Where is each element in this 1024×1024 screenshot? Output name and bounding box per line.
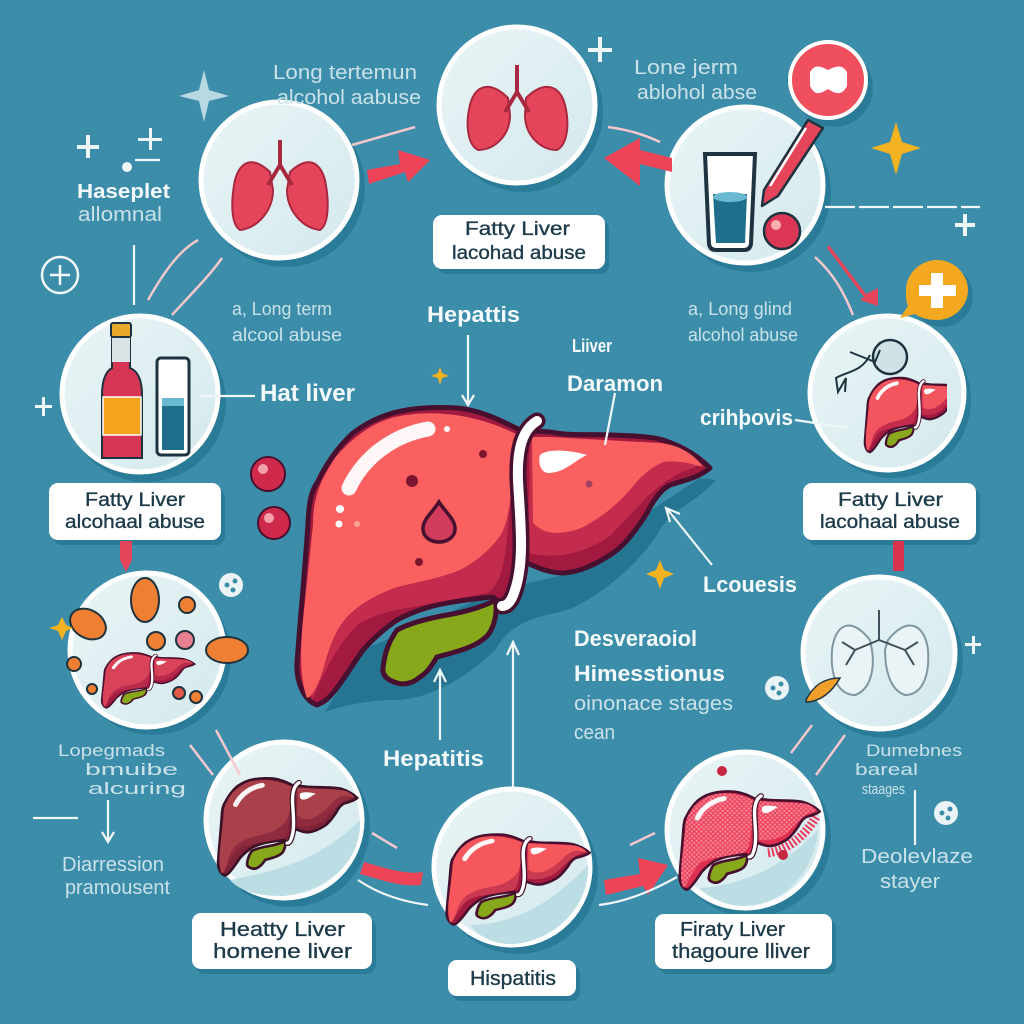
annotation texts: oinonace stages xyxy=(574,693,733,715)
node: top-left lungs xyxy=(201,102,365,267)
label: top: lacohad abuse xyxy=(452,243,586,264)
central labels: Himesstionus xyxy=(574,661,725,686)
arrows: white guide lines xyxy=(33,160,980,905)
label: bottom-left xyxy=(192,913,376,974)
arrows: thin xyxy=(148,127,853,848)
annotation texts: Lopegmads xyxy=(58,741,165,760)
annotation texts: bmuibe xyxy=(85,760,178,779)
annotation texts: staages xyxy=(862,781,905,798)
central labels: Hepattis xyxy=(427,302,520,327)
central liver spots xyxy=(336,426,592,566)
annotation texts: a, Long glind xyxy=(688,299,792,319)
node: bottom liver xyxy=(434,789,598,954)
node: left bottle xyxy=(62,316,226,482)
central labels: Liiver xyxy=(572,336,612,356)
decorations xyxy=(35,37,981,654)
central labels: Lcouesis xyxy=(703,572,797,597)
node: bottom-right liver xyxy=(667,752,831,917)
annotation texts: Diarression xyxy=(62,854,164,876)
icon: small circles xyxy=(219,573,958,825)
annotation texts: Lone jerm xyxy=(634,57,738,79)
node: right liver xyxy=(810,316,971,478)
annotation texts: alcuring xyxy=(88,779,186,798)
label: bottom-left: homene liver xyxy=(213,941,352,963)
annotation texts xyxy=(58,57,973,899)
label: left xyxy=(49,483,225,545)
node: top-right glass xyxy=(667,107,831,272)
central labels: Hepatitis xyxy=(383,746,484,771)
central labels: Daramon xyxy=(567,371,663,396)
annotation texts: ablohol abse xyxy=(637,82,757,104)
central labels: Hat liver xyxy=(260,380,355,407)
annotation texts: Deolevlaze xyxy=(861,846,973,868)
central labels: Haseplet xyxy=(77,181,170,203)
annotation texts: a, Long term xyxy=(232,299,332,319)
annotation texts: cean xyxy=(574,722,615,744)
icon: gold stars xyxy=(49,122,921,640)
annotation texts: alcohol aabuse xyxy=(277,87,421,109)
central labels: crihþovis xyxy=(700,405,793,430)
icon: red pin xyxy=(762,42,873,206)
label: bottom-right: thagoure lliver xyxy=(672,941,810,963)
icon: speech bubble plus xyxy=(900,260,973,327)
label: bottom-left: Heatty Liver xyxy=(220,919,345,941)
label: right: lacohaal abuse xyxy=(820,512,960,533)
label: left: Fatty Liver xyxy=(85,490,186,511)
label: bottom-right: Firaty Liver xyxy=(680,919,785,941)
node: right lungs pale xyxy=(803,577,963,738)
label: right: Fatty Liver xyxy=(838,490,944,511)
label: right xyxy=(803,483,980,545)
node: bottom-left liver xyxy=(206,742,370,907)
annotation texts: Long tertemun xyxy=(273,62,417,84)
annotation texts: alcohol abuse xyxy=(688,325,798,345)
central labels xyxy=(77,181,797,771)
annotation texts: pramousent xyxy=(65,877,170,899)
central labels: Desveraoiol xyxy=(574,626,697,651)
label: top xyxy=(433,215,609,274)
label: left: alcohaal abuse xyxy=(65,512,205,533)
icon: plus circle xyxy=(42,257,78,293)
annotation texts: bareal xyxy=(855,760,918,779)
central liver xyxy=(297,407,716,712)
annotation texts: alcool abuse xyxy=(232,325,342,345)
annotation texts: allomnal xyxy=(78,204,162,226)
label: bottom-right xyxy=(655,914,836,974)
annotation texts: Dumebnes xyxy=(866,741,962,760)
floating red dots xyxy=(251,457,290,539)
node: left cells xyxy=(65,573,248,735)
label: top: Fatty Liver xyxy=(465,219,571,240)
label: bottom: Hispatitis xyxy=(470,968,556,990)
label: bottom xyxy=(448,960,580,1001)
node: top lungs xyxy=(439,27,603,192)
annotation texts: stayer xyxy=(880,871,940,893)
arrows: red block xyxy=(120,138,904,895)
